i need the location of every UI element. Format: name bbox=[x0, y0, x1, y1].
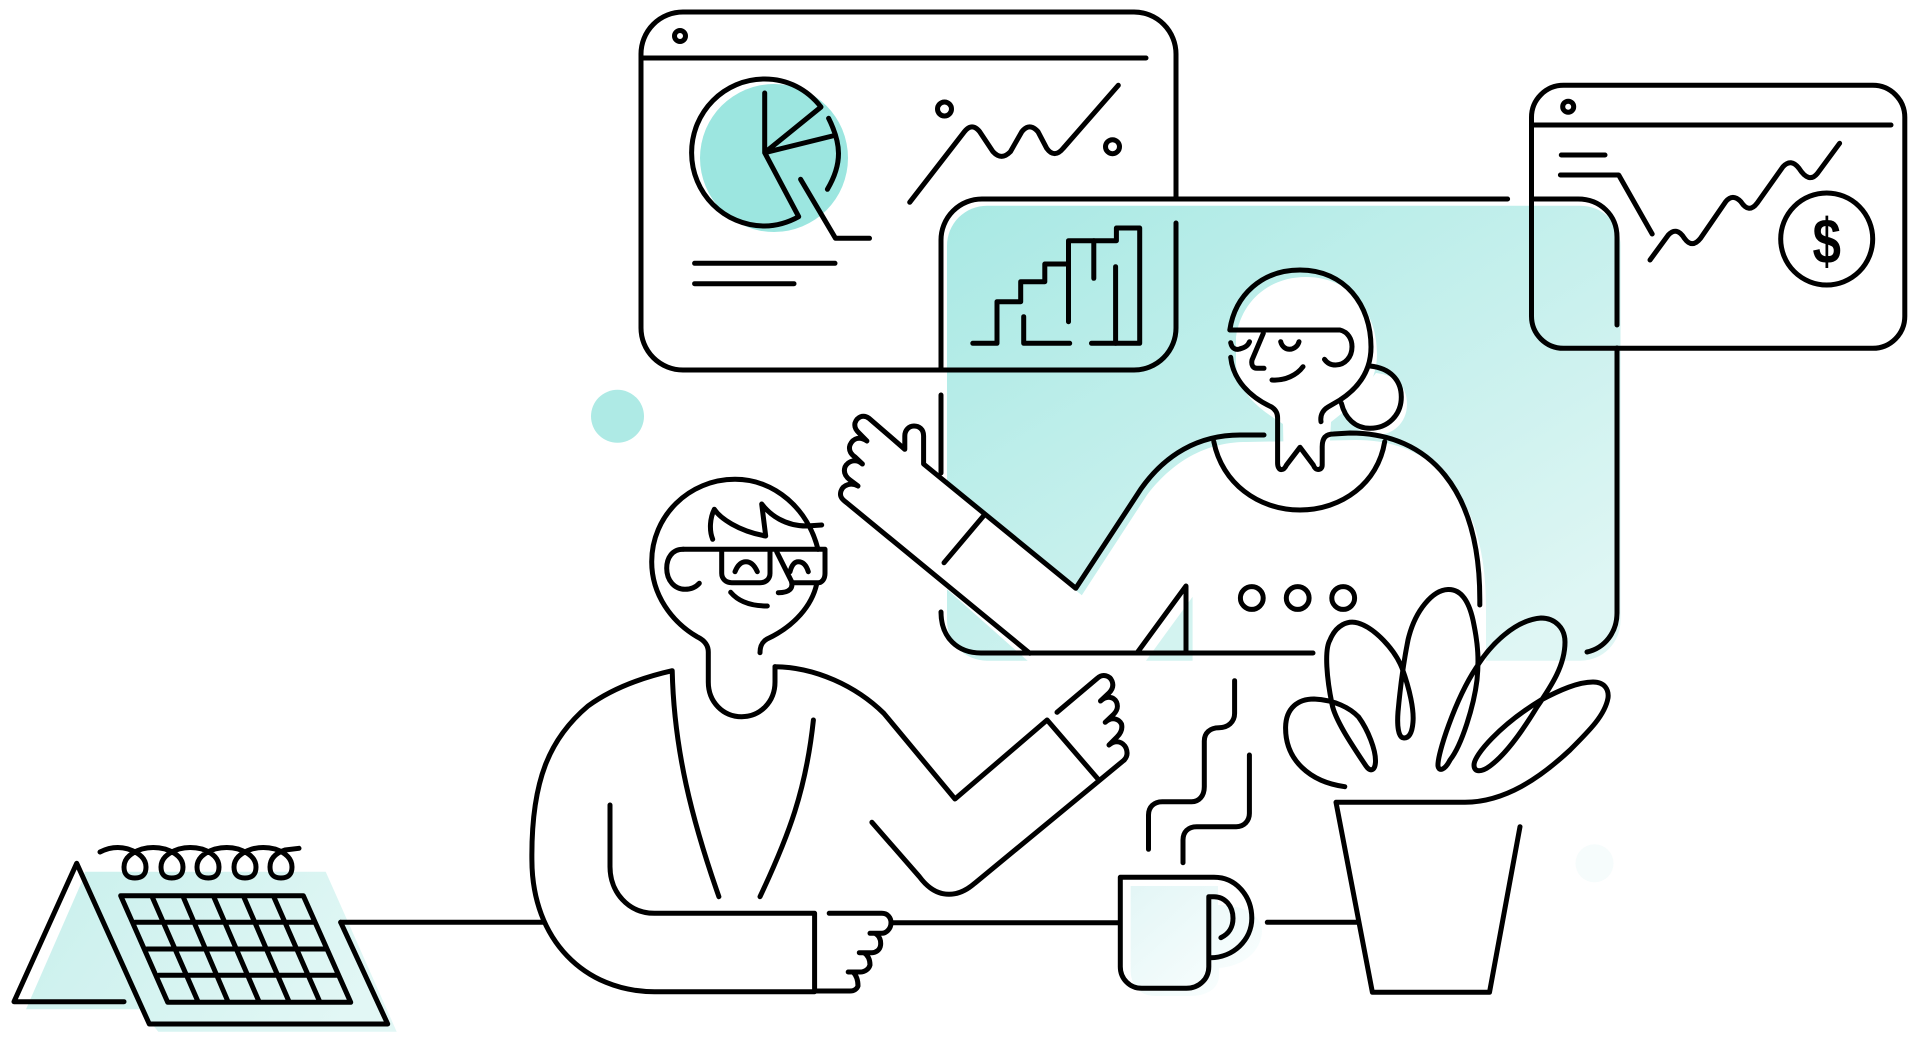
window header bar bbox=[1532, 122, 1891, 128]
woman face bbox=[1231, 333, 1303, 380]
calendar bbox=[14, 848, 397, 1032]
woman sleeve cuff bbox=[944, 515, 984, 563]
mug outline bbox=[1120, 877, 1252, 988]
text lines and descending line bbox=[1560, 155, 1652, 234]
panel: large presentation board outline bbox=[941, 199, 1617, 653]
window header bar bbox=[641, 56, 1146, 60]
figure: man with glasses bbox=[532, 479, 1127, 992]
woman head and fringe bbox=[1230, 270, 1371, 422]
text lines bbox=[695, 263, 835, 284]
woman white silhouette bbox=[846, 277, 1486, 677]
man glasses bbox=[683, 549, 825, 583]
panel: top right browser window bbox=[1532, 85, 1905, 348]
pie chart bbox=[692, 79, 870, 238]
man shoulder and lapel bbox=[532, 671, 815, 992]
man upper hand bbox=[1057, 676, 1127, 760]
woman neckline bbox=[1214, 442, 1385, 510]
steam left bbox=[1148, 681, 1235, 849]
man nose and mouth bbox=[731, 552, 792, 606]
table line right bbox=[1267, 920, 1359, 925]
panel: teal presentation board fill bbox=[947, 206, 1620, 661]
woman bun bbox=[1341, 366, 1401, 428]
table line left bbox=[341, 920, 543, 925]
man eyes bbox=[735, 562, 808, 572]
man head and neck bbox=[652, 479, 818, 717]
panel: top left browser window bbox=[641, 12, 1176, 370]
faint teal dot bbox=[1576, 844, 1614, 882]
table line middle bbox=[891, 920, 1119, 925]
woman jaw, neck and collar bbox=[1231, 357, 1480, 605]
woman shoulder and raised arm with hand bbox=[840, 416, 1264, 653]
stepped bar chart bbox=[973, 228, 1140, 343]
coffee mug bbox=[1120, 877, 1262, 996]
window dot bbox=[674, 30, 686, 42]
jacket triangle bbox=[1138, 586, 1186, 653]
man raised arm bbox=[775, 667, 1124, 894]
man lower hand bbox=[815, 913, 891, 991]
window dot bbox=[1563, 101, 1574, 112]
icon: dollar coin: $ bbox=[1812, 207, 1841, 277]
figure: woman presenter bbox=[840, 270, 1480, 653]
man right lapel bbox=[760, 720, 813, 897]
mug tint bbox=[1131, 886, 1262, 996]
line chart with two points bbox=[910, 85, 1120, 202]
calendar teal fill bbox=[26, 872, 397, 1032]
man ear bbox=[667, 549, 699, 589]
calendar spiral binding bbox=[100, 848, 299, 878]
calendar grid bbox=[121, 896, 351, 1002]
potted plant bbox=[1286, 589, 1608, 992]
calendar frame bbox=[14, 863, 388, 1024]
steam right bbox=[1183, 755, 1249, 863]
decorative teal dot bbox=[591, 390, 644, 443]
man lower arm and sleeve bbox=[610, 805, 815, 991]
jacket buttons bbox=[1240, 587, 1355, 609]
teal triangle accent on the woman's jacket bbox=[1146, 597, 1193, 661]
man hair bbox=[710, 504, 822, 539]
rising line chart bbox=[1650, 143, 1840, 260]
icon: dollar coin bbox=[1781, 193, 1873, 285]
